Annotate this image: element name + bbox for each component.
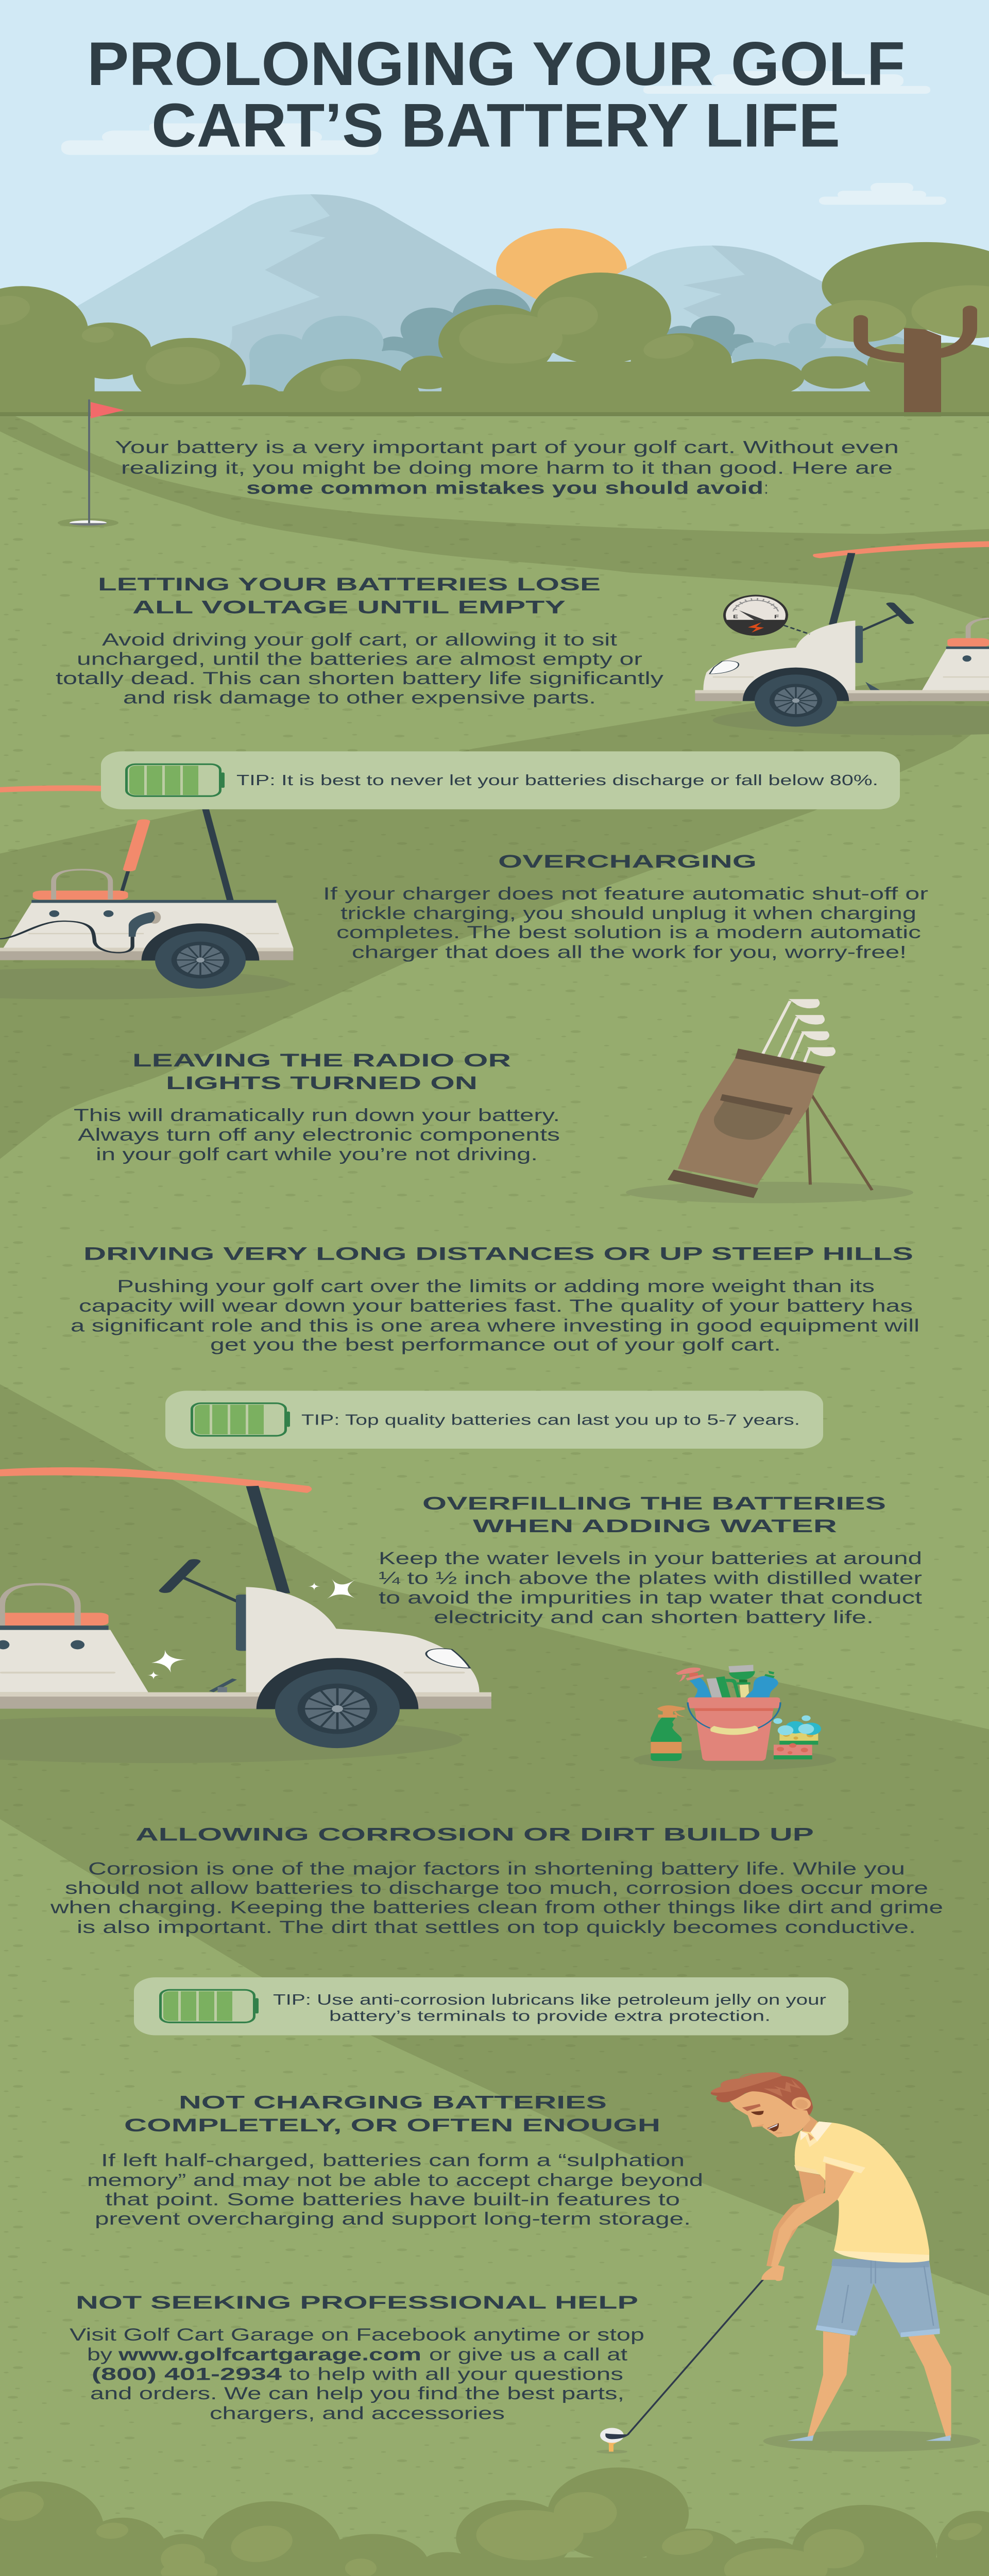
body text bbox=[71, 1276, 919, 1354]
heading: ALL VOLTAGE UNTIL EMPTY bbox=[132, 597, 566, 617]
ground shadow bbox=[763, 2430, 980, 2452]
mountain: right bbox=[505, 246, 908, 410]
shirt bbox=[795, 2122, 929, 2260]
heading: LIGHTS TURNED ON bbox=[166, 1073, 478, 1093]
tip text: battery’s terminals to provide extra protection. bbox=[329, 2008, 771, 2024]
body text: a significant role and this is one area where investing in good equipment will bbox=[71, 1315, 919, 1335]
charger cable and plug bbox=[0, 911, 161, 953]
golf club heads bbox=[789, 999, 835, 1056]
fairway: dark band two bbox=[0, 669, 989, 1159]
sun bbox=[496, 228, 627, 311]
heading: LETTING YOUR BATTERIES LOSE bbox=[98, 574, 601, 595]
fairway: dark band one bbox=[0, 416, 989, 620]
body text bbox=[50, 1858, 943, 1937]
foreground bushes bbox=[0, 273, 989, 440]
mountain: left bbox=[0, 194, 643, 410]
body text: (800) 401-2934 bbox=[92, 2364, 282, 2384]
icon: battery bbox=[161, 1990, 259, 2023]
body text: charger that does all the work for you, worry-free! bbox=[352, 942, 907, 962]
body text: trickle charging, you should unplug it when charging bbox=[340, 903, 916, 923]
body text: www.golfcartgarage.com bbox=[118, 2345, 421, 2364]
hand bbox=[761, 2265, 785, 2281]
heading: ALLOWING CORROSION OR DIRT BUILD UP bbox=[135, 1824, 814, 1844]
body text: ¼ to ½ inch above the plates with distilled water bbox=[379, 1568, 922, 1588]
cart body bbox=[703, 620, 855, 690]
illustration: golf cart rear with charger bbox=[0, 785, 293, 999]
neck bbox=[802, 2115, 817, 2132]
intro text bbox=[115, 437, 899, 498]
tip text bbox=[273, 1991, 826, 2024]
heading: DRIVING VERY LONG DISTANCES OR UP STEEP HILLS bbox=[83, 1244, 913, 1264]
fairway: dark band three bbox=[0, 1384, 989, 2296]
section: overfilling batteries bbox=[379, 1493, 922, 1627]
section: not charging completely bbox=[87, 2092, 703, 2229]
body text: Avoid driving your golf cart, or allowing it to sit bbox=[102, 630, 617, 650]
hair bbox=[711, 2072, 813, 2115]
body text: in your golf cart while you’re not driving. bbox=[96, 1144, 538, 1164]
illustration: golf cart front with gauge bbox=[695, 541, 989, 735]
tip box: anti-corrosion bbox=[134, 1977, 848, 2035]
shorts bbox=[817, 2259, 940, 2336]
cart shadow bbox=[0, 968, 290, 999]
heading: NOT CHARGING BATTERIES bbox=[179, 2092, 607, 2112]
body text: is also important. The dirt that settles on top quickly becomes conductive. bbox=[77, 1917, 916, 1937]
heading: LEAVING THE RADIO OR bbox=[132, 1050, 511, 1071]
body text: chargers, and accessories bbox=[210, 2403, 505, 2423]
body text bbox=[323, 884, 928, 962]
heading: OVERFILLING THE BATTERIES bbox=[422, 1493, 886, 1514]
body text: by bbox=[87, 2345, 112, 2364]
bottom bushes bbox=[0, 2467, 989, 2576]
section: overcharging bbox=[323, 851, 928, 962]
golf club shafts bbox=[762, 1001, 810, 1071]
cart body bbox=[246, 1587, 480, 1693]
body text: and orders. We can help you find the best parts, bbox=[90, 2383, 624, 2403]
section: professional help bbox=[70, 2293, 644, 2423]
body text: Keep the water levels in your batteries at around bbox=[379, 1548, 922, 1568]
clouds bbox=[61, 71, 946, 205]
distant bushes bbox=[249, 289, 918, 402]
body text bbox=[70, 2325, 644, 2423]
icon: battery bbox=[127, 764, 225, 796]
body text: Pushing your golf cart over the limits or adding more weight than its bbox=[117, 1276, 875, 1296]
body text: that point. Some batteries have built-in features to bbox=[105, 2189, 680, 2209]
section: leaving radio or lights on bbox=[74, 1050, 560, 1164]
body text: memory” and may not be able to accept charge beyond bbox=[87, 2170, 703, 2190]
heading: WHEN ADDING WATER bbox=[473, 1516, 837, 1536]
body text: completes. The best solution is a modern automatic bbox=[336, 922, 921, 942]
section: driving long distances bbox=[71, 1244, 919, 1354]
wheel bbox=[257, 1658, 418, 1748]
front arm bbox=[771, 2163, 854, 2267]
body text: should not allow batteries to discharge too much, corrosion does occur more bbox=[65, 1878, 928, 1898]
spray bottle bbox=[651, 1705, 686, 1761]
back arm bbox=[766, 2171, 825, 2267]
icon: battery gauge: E bbox=[733, 614, 738, 619]
body text: capacity will wear down your batteries fast. The quality of your battery has bbox=[79, 1296, 913, 1315]
intro text: Your battery is a very important part of your golf cart. Without even bbox=[115, 437, 899, 457]
heading: COMPLETELY, OR OFTEN ENOUGH bbox=[124, 2115, 660, 2135]
heading bbox=[132, 1050, 511, 1093]
body text: electricity and can shorten battery life. bbox=[434, 1607, 874, 1627]
icon: battery bbox=[192, 1403, 290, 1436]
landscape: mountains and bushes bbox=[0, 194, 989, 440]
heading: OVERCHARGING bbox=[498, 851, 757, 871]
sky background bbox=[0, 0, 989, 420]
shoes bbox=[787, 2435, 814, 2441]
icon: battery gauge bbox=[723, 595, 810, 636]
intro text: some common mistakes you should avoid bbox=[246, 478, 763, 498]
sponges and bubbles bbox=[773, 1716, 821, 1759]
tip text: TIP: It is best to never let your batteries discharge or fall below 80%. bbox=[236, 772, 878, 789]
title bbox=[87, 29, 905, 160]
heading bbox=[124, 2092, 660, 2135]
illustration: clean golf cart bbox=[0, 1467, 491, 1763]
icon: flag and hole bbox=[58, 399, 124, 528]
body text: Always turn off any electronic components bbox=[78, 1125, 560, 1145]
tip text: TIP: Use anti-corrosion lubricans like petroleum jelly on your bbox=[273, 1991, 826, 2008]
icon: battery gauge: F bbox=[774, 614, 779, 619]
body text: totally dead. This can shorten battery life significantly bbox=[56, 668, 663, 688]
illustration: cleaning bucket bbox=[634, 1665, 836, 1770]
body text: This will dramatically run down your battery. bbox=[74, 1105, 560, 1125]
body text bbox=[379, 1548, 922, 1627]
illustration: golf bag bbox=[626, 999, 913, 1203]
section: letting batteries lose voltage bbox=[56, 574, 663, 707]
body text: to help with all your questions bbox=[289, 2364, 623, 2384]
body text bbox=[74, 1105, 560, 1164]
body text: uncharged, until the batteries are almost empty or bbox=[77, 649, 642, 669]
golf ball and tee bbox=[596, 2428, 627, 2453]
cart roof bbox=[813, 541, 989, 558]
body text: If your charger does not feature automatic shut-off or bbox=[323, 884, 928, 903]
bush highlights bbox=[0, 293, 704, 392]
bucket bbox=[688, 1698, 780, 1761]
wheel bbox=[142, 923, 259, 989]
body text bbox=[87, 2150, 703, 2229]
tip box: discharge bbox=[101, 751, 900, 809]
wheel bbox=[743, 668, 849, 726]
body text: to avoid the impurities in tap water that conduct bbox=[379, 1588, 922, 1607]
cart shadow bbox=[0, 1716, 463, 1763]
body text: Visit Golf Cart Garage on Facebook anytime or stop bbox=[70, 2325, 644, 2345]
cart rear bbox=[0, 1630, 148, 1692]
body text: prevent overcharging and support long-term storage. bbox=[95, 2209, 691, 2229]
tip text: TIP: Top quality batteries can last you up to 5-7 years. bbox=[301, 1412, 800, 1429]
tip box: battery lifespan bbox=[165, 1391, 823, 1449]
body text: and risk damage to other expensive parts. bbox=[123, 688, 596, 707]
cart roof bbox=[0, 1467, 312, 1493]
sparkles bbox=[147, 1579, 356, 1680]
section: corrosion or dirt bbox=[50, 1824, 943, 1937]
ground band and grass bbox=[0, 412, 989, 416]
body text bbox=[56, 630, 663, 707]
golf club bbox=[627, 2279, 763, 2435]
body text: If left half-charged, batteries can form a “sulphation bbox=[101, 2150, 685, 2170]
face bbox=[730, 2091, 810, 2138]
body text: Corrosion is one of the major factors in shortening battery life. While you bbox=[88, 1858, 905, 1878]
heading: NOT SEEKING PROFESSIONAL HELP bbox=[76, 2293, 638, 2313]
cart rear bbox=[922, 649, 989, 690]
heading bbox=[98, 574, 601, 617]
intro text: realizing it, you might be doing more harm to it than good. Here are bbox=[121, 457, 893, 478]
cart shadow bbox=[713, 705, 989, 735]
brushes and bottles bbox=[676, 1665, 778, 1698]
tree bbox=[815, 242, 989, 429]
illustration: golfer bbox=[596, 2072, 980, 2453]
body text: get you the best performance out of your golf cart. bbox=[210, 1335, 781, 1354]
body text: or give us a call at bbox=[429, 2345, 627, 2364]
collar bbox=[805, 2134, 817, 2147]
heading bbox=[422, 1493, 886, 1536]
intro text: : bbox=[764, 478, 768, 498]
legs bbox=[807, 2331, 850, 2437]
